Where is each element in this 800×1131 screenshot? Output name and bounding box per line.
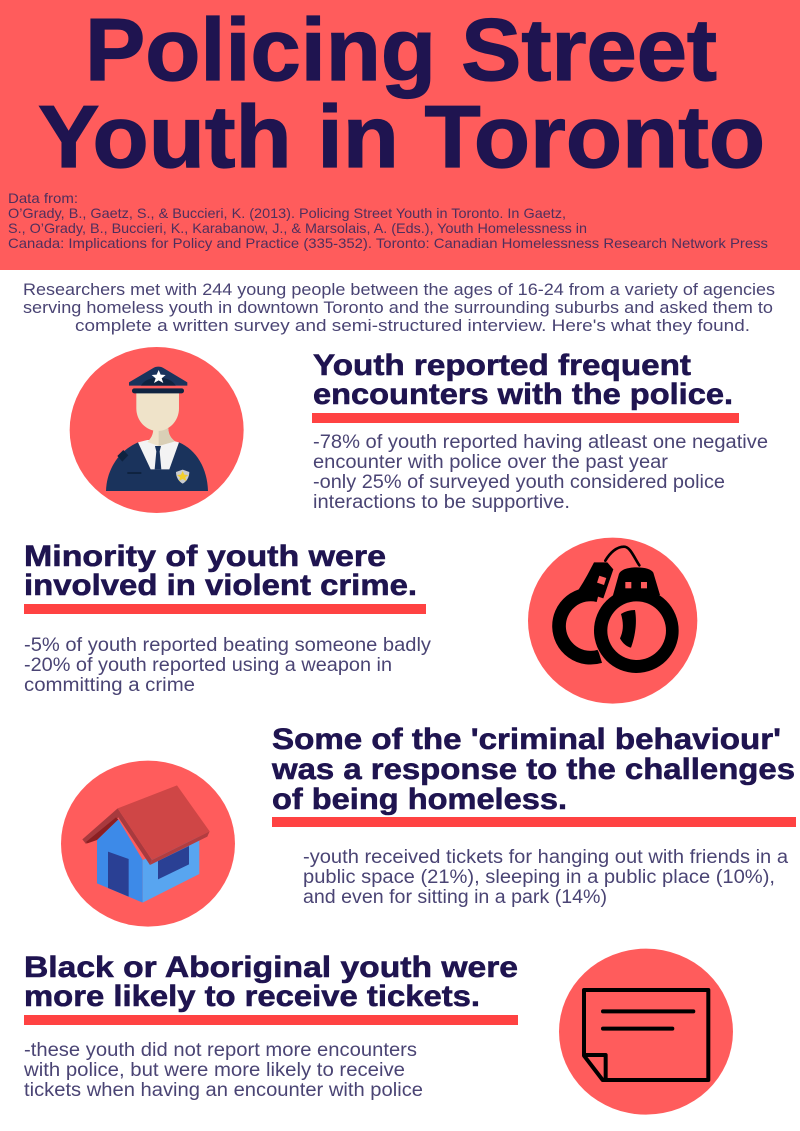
body text: committing a crime (24, 675, 195, 696)
icon: police officer (70, 347, 244, 513)
text block: data source: O’Grady, B., Gaetz, S., & Buccieri, K. (2013). Policing Street Youth in Toronto. In Gaetz, (8, 205, 566, 221)
title (38, 0, 765, 186)
body text: tickets when having an encounter with police (24, 1080, 423, 1101)
icon: handcuffs (528, 538, 697, 704)
heading (271, 723, 795, 816)
body text (24, 635, 432, 696)
section: response to homelessness (271, 723, 796, 908)
body text: -youth received tickets for hanging out with friends in a (303, 847, 788, 868)
heading: Some of the 'criminal behaviour' (272, 723, 781, 756)
heading underline (272, 817, 796, 827)
heading: involved in violent crime. (24, 569, 417, 602)
heading underline (24, 1015, 518, 1025)
body text: encounter with police over the past year (313, 452, 669, 473)
body text: public space (21%), sleeping in a public place (10%), (303, 867, 775, 888)
body text: -20% of youth reported using a weapon in (24, 655, 392, 676)
heading (313, 349, 733, 411)
text block: introduction: Researchers met with 244 young people between the ages of 16-24 from a variety of agencies (23, 281, 775, 299)
heading (24, 951, 518, 1013)
text block: introduction: serving homeless youth in downtown Toronto and the surrounding suburbs and asked them to (23, 299, 773, 317)
section: tickets (23, 951, 518, 1101)
body text: with police, but were more likely to receive (23, 1060, 405, 1081)
heading: of being homeless. (272, 783, 567, 816)
heading: was a response to the challenges (271, 753, 795, 786)
heading underline (312, 413, 739, 423)
section: frequent police encounters (312, 349, 768, 513)
body text: -these youth did not report more encounters (24, 1040, 417, 1061)
section: violent crime (24, 540, 432, 696)
heading: more likely to receive tickets. (24, 980, 480, 1013)
text block: data source: Data from: (8, 190, 78, 206)
text block: introduction: complete a written survey and semi-structured interview. Here's what they found. (75, 317, 750, 335)
title: Youth in Toronto (38, 87, 765, 186)
text block: data source: S., O’Grady, B., Buccieri, K., Karabanow, J., & Marsolais, A. (Eds.), Youth Homelessness in (8, 220, 587, 236)
body text: -5% of youth reported beating someone badly (24, 635, 432, 656)
icon: ticket note (559, 949, 733, 1115)
heading (24, 540, 417, 602)
body text (313, 432, 768, 513)
title: Policing Street (85, 0, 717, 99)
body text: -78% of youth reported having atleast one negative (313, 432, 768, 453)
panel: header (0, 0, 800, 270)
heading: Minority of youth were (24, 540, 386, 573)
body text: and even for sitting in a park (14%) (303, 887, 607, 908)
heading underline (24, 604, 426, 614)
heading: Youth reported frequent (313, 349, 691, 382)
text block: data source: Canada: Implications for Policy and Practice (335-352). Toronto: Canadian Homelessness Research Network Press (8, 235, 768, 251)
body text: interactions to be supportive. (313, 492, 570, 513)
body text (23, 1040, 423, 1101)
icon: house (61, 761, 235, 927)
heading: encounters with the police. (313, 378, 733, 411)
heading: Black or Aboriginal youth were (24, 951, 518, 984)
body text (303, 847, 788, 908)
body text: -only 25% of surveyed youth considered police (313, 472, 725, 493)
text block: introduction (23, 281, 775, 335)
text block: data source (8, 190, 768, 251)
